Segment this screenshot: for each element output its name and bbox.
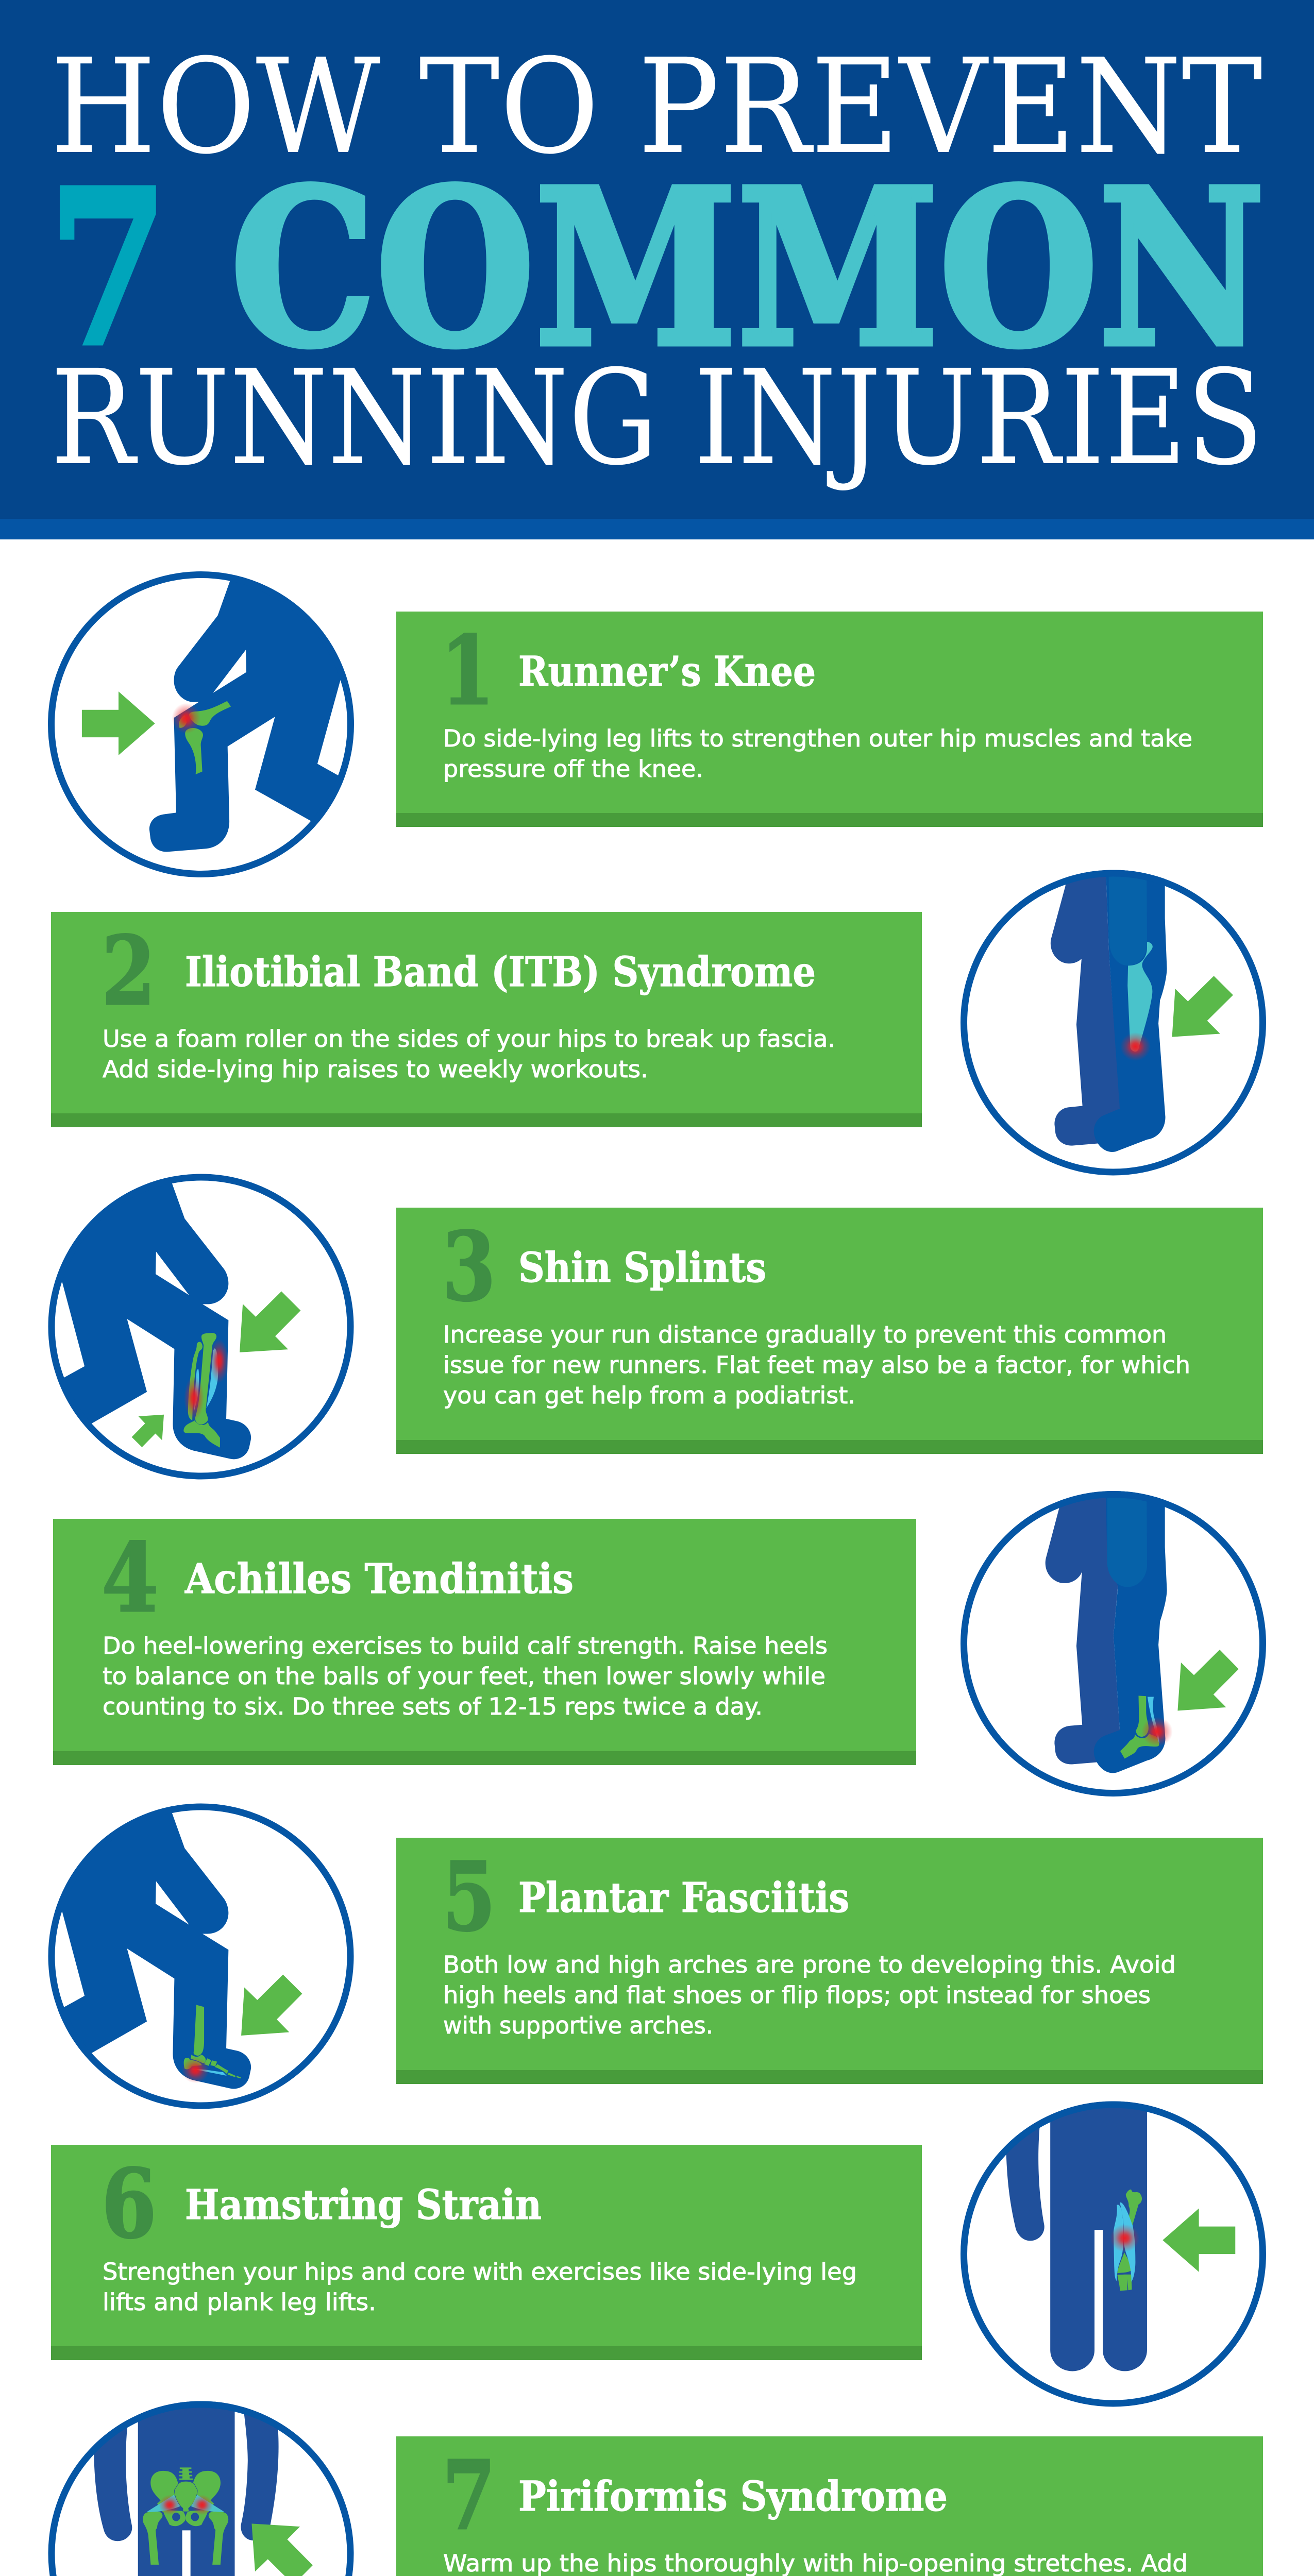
body text: Do side-lying leg lifts to strengthen outer hip muscles and take	[443, 725, 1192, 752]
plantar fascia	[191, 2069, 227, 2076]
arrow	[1163, 2209, 1235, 2272]
arrow	[82, 691, 155, 755]
tendon	[1148, 1697, 1159, 1743]
icon: achilles tendon	[964, 1486, 1262, 1793]
body text: issue for new runners. Flat feet may also be a factor, for which	[443, 1351, 1190, 1379]
panel: card 5	[396, 1838, 1263, 2084]
body text: pressure off the knee.	[443, 755, 703, 783]
heading: Piriformis Syndrome	[518, 2472, 948, 2520]
body text: you can get help from a podiatrist.	[443, 1382, 855, 1409]
icon: piriformis	[52, 2399, 350, 2576]
number 6: 6	[102, 2148, 157, 2260]
body text: to balance on the balls of your feet, then lower slowly while	[103, 1663, 826, 1690]
large arrow	[240, 1292, 300, 1352]
number 1: 1	[441, 615, 495, 726]
body text	[443, 725, 1192, 783]
body text: lifts and plank leg lifts.	[103, 2289, 376, 2316]
number 2: 2	[102, 916, 156, 1027]
icon: shin splints	[31, 1164, 350, 1476]
body text: counting to six. Do three sets of 12-15 reps twice a day.	[103, 1693, 763, 1720]
shin bones	[183, 1333, 220, 1448]
body text: Increase your run distance gradually to prevent this common	[443, 1321, 1167, 1348]
body text: with supportive arches.	[443, 2012, 713, 2039]
title number 7: 7	[47, 142, 169, 395]
pain glow	[172, 703, 201, 734]
panel: card 3	[396, 1208, 1263, 1454]
body text	[103, 1632, 828, 1720]
number 3: 3	[442, 1211, 496, 1323]
body text: Do heel-lowering exercises to build calf strength. Raise heels	[103, 1632, 828, 1659]
hamstring muscles	[1114, 2202, 1135, 2282]
panel: card 4	[53, 1519, 916, 1765]
body text: high heels and flat shoes or flip flops; opt instead for shoes	[443, 1981, 1151, 2009]
body text: Both low and high arches are prone to developing this. Avoid	[443, 1951, 1176, 1978]
pelvis skeleton	[143, 2467, 228, 2565]
leg bones	[1117, 2190, 1142, 2291]
knee bones	[179, 701, 231, 774]
body text: Strengthen your hips and core with exercises like side-lying leg	[103, 2258, 857, 2285]
pain glow	[1141, 1717, 1173, 1747]
header banner	[0, 0, 1314, 539]
arrow	[241, 1975, 302, 2036]
heading: Plantar Fasciitis	[518, 1873, 849, 1922]
piriformis muscles	[147, 2495, 224, 2512]
pain glow	[1120, 1032, 1151, 1061]
arrow	[1177, 1650, 1239, 1710]
small arrow	[132, 1415, 164, 1447]
foot bones	[184, 2005, 241, 2078]
icon: hamstring	[964, 2098, 1262, 2403]
body text	[443, 1321, 1190, 1409]
panel: card 2	[51, 912, 922, 1127]
number 5: 5	[442, 1841, 496, 1953]
panel: card 6	[51, 2145, 922, 2360]
ankle bones	[1120, 1696, 1159, 1758]
body text: Use a foam roller on the sides of your hips to break up fascia.	[103, 1025, 835, 1053]
heading: Runner’s Knee	[518, 647, 816, 696]
icon: iliotibial band	[964, 868, 1262, 1172]
body text	[103, 1025, 835, 1083]
heading: Shin Splints	[518, 1243, 766, 1292]
number 4: 4	[102, 1522, 159, 1634]
body text	[443, 1951, 1176, 2039]
muscles	[194, 1348, 218, 1412]
thigh overlay	[1107, 1486, 1147, 1587]
pain glow	[181, 2057, 209, 2083]
pain glow	[1110, 2224, 1139, 2252]
thigh overlay	[1108, 868, 1147, 965]
pain glows	[159, 2495, 213, 2515]
heading: Achilles Tendinitis	[184, 1554, 574, 1603]
icon: plantar fasciitis	[31, 1794, 350, 2106]
heading: Iliotibial Band (ITB) Syndrome	[185, 947, 816, 996]
heading: Hamstring Strain	[185, 2180, 542, 2229]
number 7: 7	[442, 2440, 496, 2551]
pain glows	[184, 1339, 228, 1420]
body text: Add side-lying hip raises to weekly workouts.	[103, 1056, 648, 1083]
panel: card 7	[396, 2436, 1263, 2576]
IT band	[1127, 942, 1153, 1052]
arrow	[251, 2523, 313, 2576]
arrow	[1172, 976, 1233, 1037]
icon: runner's knee	[52, 556, 366, 874]
panel: card 1	[396, 612, 1263, 827]
body text	[103, 2258, 857, 2316]
